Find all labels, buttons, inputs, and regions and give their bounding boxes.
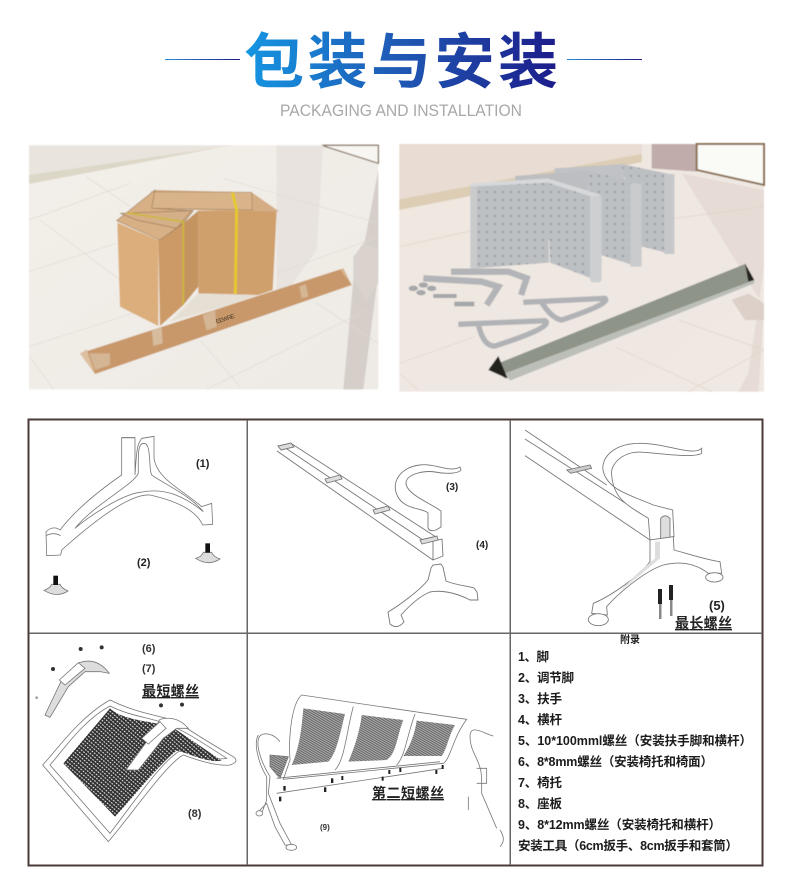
label 9: (9): [320, 823, 330, 832]
long bolts: [658, 585, 673, 619]
assembled armrest: [603, 443, 702, 540]
title: 包装与安装: 包装与安装: [244, 14, 558, 101]
appendix heading: 附录: [620, 633, 640, 646]
subtitle: PACKAGING AND INSTALLATION: [280, 101, 522, 120]
assembled foot: [592, 537, 722, 615]
list item 3: 3、扶手: [518, 691, 562, 706]
list item 7: 7、椅托: [518, 775, 562, 790]
long bar: [490, 264, 754, 378]
assembly diagram frame: [28, 420, 762, 866]
long tube: [80, 268, 352, 374]
label 6: (6): [142, 643, 156, 655]
crossbar: [277, 762, 443, 793]
bolts: [409, 282, 474, 306]
list item 5: 5、10*100mml螺丝（安装扶手脚和横杆）: [518, 733, 752, 748]
panel: step 4 seat and bracket: [35, 643, 236, 842]
seat brackets: [523, 298, 606, 320]
mesh seats: [292, 708, 345, 765]
beam: [277, 443, 443, 560]
photo: packed cartons: [29, 145, 378, 389]
note second shortest bolt: 第二短螺丝: [372, 785, 444, 801]
title block: [165, 14, 642, 120]
panel: step 1 leg and adjusters: [44, 436, 220, 595]
photo: unpacked parts: [399, 144, 764, 392]
note longest bolt: 最长螺丝: [675, 615, 732, 631]
photo: packed cartons: EEWRE: [215, 314, 236, 326]
title divider left: [165, 59, 240, 60]
panel: step 2 beam arm foot: [277, 443, 488, 627]
seat plate: [43, 700, 236, 842]
foot: [388, 564, 478, 627]
panel: step 3 assembled with bolts: [525, 430, 732, 631]
bracket loose: [45, 661, 109, 717]
panel: step 5 bench: [256, 695, 503, 850]
label 1: (1): [196, 458, 210, 470]
bench bolts: [279, 765, 444, 801]
seat panels back: [554, 164, 625, 223]
adjuster foot right: [196, 552, 220, 563]
label 8: (8): [188, 808, 202, 820]
bracket fitted: [126, 718, 188, 770]
leg sketch: [44, 436, 220, 595]
list item 4: 4、横杆: [518, 712, 562, 727]
label 2: (2): [137, 557, 151, 569]
list item 8: 8、座板: [518, 796, 562, 811]
panel: appendix parts list: [518, 633, 752, 853]
label 3: (3): [446, 482, 458, 493]
bracket screws: [35, 645, 184, 707]
label 7: (7): [142, 663, 156, 675]
label 5: (5): [709, 598, 725, 613]
list item 2: 2、调节脚: [518, 670, 574, 685]
list item 6: 6、8*8mm螺丝（安装椅托和椅面）: [518, 754, 713, 769]
title divider right: [567, 59, 642, 60]
label 4: (4): [476, 540, 488, 551]
note shortest bolt: 最短螺丝: [142, 683, 199, 699]
assembled beam: [525, 430, 650, 540]
seat panel front: [471, 182, 549, 268]
left arm and leg: [256, 734, 292, 845]
armrest: [395, 465, 461, 531]
carton: [117, 223, 158, 326]
armrest legs: [451, 272, 527, 295]
list item 1: 1、脚: [518, 650, 549, 664]
adjuster foot left: [44, 584, 68, 595]
backrest frame: [283, 695, 467, 779]
list item 9: 9、8*12mm螺丝（安装椅托和横杆）: [518, 817, 721, 832]
right arm and leg: [468, 730, 503, 847]
installation tools: 安装工具（6cm扳手、8cm扳手和套筒）: [518, 838, 738, 853]
